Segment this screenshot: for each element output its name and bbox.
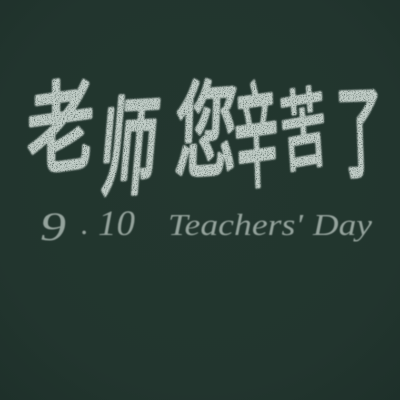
character: 师: 师 xyxy=(95,89,163,211)
date: 9 . 10: 9 xyxy=(40,204,66,249)
caption: Teachers' Day: Teachers' xyxy=(168,207,305,242)
date: 9 . 10: 10 xyxy=(98,203,135,243)
caption: Teachers' Day xyxy=(168,207,372,242)
character: 苦: 苦 xyxy=(278,79,330,184)
caption: Teachers' Day: Day xyxy=(312,207,372,242)
character: 您: 您 xyxy=(173,72,239,193)
date and occasion line xyxy=(40,203,372,249)
character: 辛: 辛 xyxy=(233,74,280,205)
chalk headline xyxy=(27,69,385,211)
character: 了: 了 xyxy=(335,79,385,191)
date: 9 . 10 xyxy=(40,203,135,249)
date: 9 . 10: . xyxy=(81,206,89,241)
character: 老: 老 xyxy=(27,69,94,189)
